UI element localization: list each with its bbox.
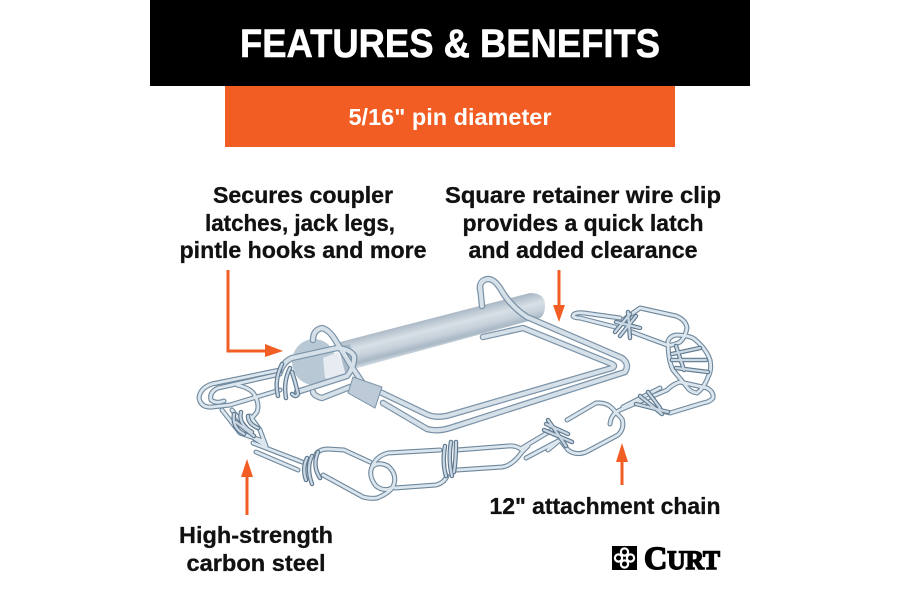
arrow: to wire clip	[553, 270, 565, 322]
wire clip	[280, 279, 627, 430]
logo wordmark: CURT	[644, 541, 720, 577]
product: hitch pin with chain	[199, 279, 713, 498]
arrow: to coupler pin head	[228, 270, 283, 357]
callout text: square retainer wire clip: provides a quick latch	[462, 210, 704, 236]
clip ferrule	[348, 377, 382, 408]
pin head	[292, 339, 356, 385]
callout text: secures coupler: pintle hooks and more	[180, 237, 426, 263]
callout text: square retainer wire clip: Square retainer wire clip	[445, 182, 721, 208]
callout text: high-strength carbon steel: High-strength	[179, 522, 333, 548]
arrow: to chain	[616, 443, 628, 485]
callout text: secures coupler: Secures coupler	[213, 182, 393, 208]
callout text: secures coupler: latches, jack legs,	[205, 210, 395, 236]
orange banner: pin diameter: 5/16" pin diameter	[348, 104, 552, 130]
pin shaft	[340, 293, 545, 370]
header banner: title	[150, 0, 750, 86]
callout text: secures coupler	[180, 182, 426, 263]
callout text: high-strength carbon steel	[179, 522, 333, 576]
header banner: title: FEATURES & BENEFITS	[240, 22, 660, 66]
chain	[199, 308, 713, 498]
logo icon	[612, 546, 637, 570]
callout text: high-strength carbon steel: carbon steel	[186, 550, 326, 576]
callout text: attachment chain: 12" attachment chain	[490, 493, 720, 519]
orange banner: pin diameter	[225, 86, 675, 147]
callout text: square retainer wire clip	[445, 182, 721, 263]
logo: CURT	[612, 541, 720, 577]
callout text: square retainer wire clip: and added clearance	[468, 237, 698, 263]
arrow: to carbon steel link	[241, 459, 253, 515]
